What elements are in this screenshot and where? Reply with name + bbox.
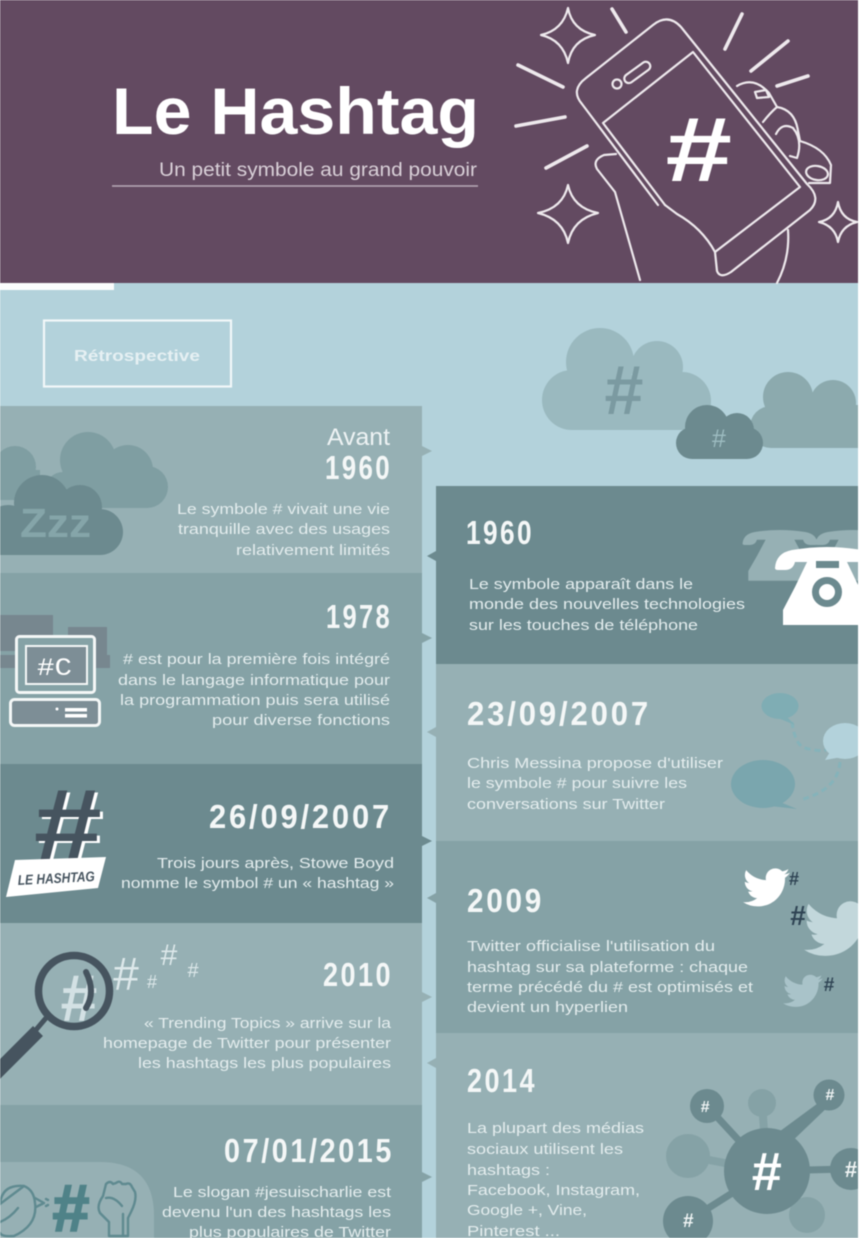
panel: 2010 <box>0 923 432 1105</box>
text block <box>467 755 723 813</box>
icon: twitter birds: # <box>790 900 806 931</box>
text block: devient un hyperlien <box>467 999 628 1016</box>
icon: hashtag network: # <box>826 1087 835 1104</box>
panel: 1960 telephone <box>427 486 860 664</box>
icon: hashtag network: # <box>683 1211 694 1232</box>
panel: 1978 <box>0 573 432 764</box>
text block: pour diverse fonctions <box>212 712 390 729</box>
icon: magnifying glass over hashtags: # <box>147 972 157 992</box>
text block <box>467 1120 644 1238</box>
icon: magnifying glass over hashtags <box>0 939 199 1075</box>
icon: hashtag network: # <box>701 1099 710 1116</box>
text block: hashtags : <box>467 1162 550 1179</box>
heading <box>326 428 390 480</box>
icon: sleeping clouds: Zzz <box>20 500 91 546</box>
icon: sky clouds with hashtags: # <box>712 425 726 453</box>
icon: le hashtag stamp: # <box>32 768 100 882</box>
text block: Chris Messina propose d'utiliser <box>467 755 723 772</box>
subtitle: Un petit symbole au grand pouvoir <box>159 160 478 181</box>
text block: dans le langage informatique pour <box>118 672 390 689</box>
heading: 07/01/2015 <box>224 1132 394 1169</box>
heading: 2014 <box>467 1062 537 1099</box>
text block <box>467 938 754 1016</box>
text block: conversations sur Twitter <box>467 796 665 813</box>
icon: magnifying glass over hashtags: # <box>113 948 139 1000</box>
heading: 26/09/2007 <box>209 798 392 835</box>
panel: 07/01/2015 <box>0 1105 432 1238</box>
icon: hashtag network: # <box>845 1157 857 1182</box>
icon: magnifying glass over hashtags: # <box>60 961 97 1035</box>
text block: Le symbole apparaît dans le <box>469 576 693 593</box>
text block <box>121 855 394 892</box>
heading: 1960 <box>466 514 534 551</box>
icon: le hashtag stamp: LE HASHTAG <box>17 868 95 888</box>
text block: Le symbole # vivait une vie <box>177 501 390 518</box>
icon: twitter birds <box>743 868 860 1007</box>
icon: magnifying glass over hashtags: # <box>161 939 178 972</box>
icon: le hashtag stamp <box>6 790 106 898</box>
text block <box>469 576 745 634</box>
text block: tranquille avec des usages <box>178 521 390 538</box>
icon: sparkle stars <box>538 8 857 243</box>
accent bar <box>0 283 114 290</box>
heading: 1978 <box>326 598 392 635</box>
text block: hashtag sur sa plateforme : chaque <box>467 959 748 976</box>
text block: sur les touches de téléphone <box>469 617 698 634</box>
text block: devenu l'un des hashtags les <box>162 1204 391 1221</box>
text block: les hashtags les plus populaires <box>138 1055 391 1072</box>
section label: Rétrospective: Rétrospective <box>74 348 200 365</box>
icon: hand holding phone with hashtag <box>516 8 857 283</box>
icon: radiating rays <box>516 9 808 168</box>
text block: relativement limités <box>236 542 390 559</box>
text block: La plupart des médias <box>467 1120 644 1137</box>
text block: nomme le symbol # un « hashtag » <box>121 875 394 892</box>
title: Le Hashtag <box>112 74 479 148</box>
text block: sociaux utilisent les <box>467 1141 623 1158</box>
header banner <box>0 0 858 283</box>
icon: sky clouds with hashtags <box>542 328 858 459</box>
heading: 23/09/2007 <box>467 695 651 732</box>
icon: sky clouds with hashtags: # <box>605 351 643 429</box>
text block: Facebook, Instagram, <box>467 1182 640 1199</box>
text block: « Trending Topics » arrive sur la <box>144 1015 392 1032</box>
icon: computer <box>0 615 110 726</box>
icon: hashtag network <box>663 1080 860 1238</box>
icon: magnifying glass over hashtags: # <box>187 960 199 982</box>
text block <box>162 1184 392 1238</box>
icon: charlie badge <box>0 1162 154 1238</box>
text block: homepage de Twitter pour présenter <box>103 1035 391 1052</box>
text block: Trois jours après, Stowe Boyd <box>157 855 394 872</box>
text block: le symbole # pour suivre les <box>467 775 687 792</box>
text block: Le slogan #jesuischarlie est <box>173 1184 392 1201</box>
icon: hashtag network: # <box>751 1142 781 1202</box>
icon: twitter birds: # <box>824 975 835 996</box>
icon: chat bubbles <box>731 693 860 809</box>
text block: # est pour la première fois intégré <box>123 651 390 668</box>
heading: 2009 <box>467 882 544 919</box>
icon: sleeping clouds <box>0 432 168 555</box>
heading: 2010 <box>323 956 393 993</box>
panel: 2009 <box>427 841 860 1033</box>
icon: telephones <box>743 530 860 625</box>
text block: la programmation puis sera utilisé <box>120 692 390 709</box>
panel: 26/09/2007 <box>0 764 432 923</box>
panel: 2014 <box>427 1033 860 1238</box>
panel: Avant 1960 <box>0 406 432 573</box>
icon: le hashtag stamp: # <box>35 770 103 884</box>
heading: Avant <box>327 424 390 451</box>
text block <box>103 1015 392 1072</box>
icon: phone hash: # <box>664 97 731 201</box>
text block: monde des nouvelles technologies <box>469 596 745 613</box>
icon: computer: #C <box>37 654 72 683</box>
panel: 23/09/2007 <box>427 664 860 841</box>
text block: Google +, Vine, <box>467 1202 587 1219</box>
section label: Rétrospective <box>44 320 231 386</box>
text block <box>177 501 390 559</box>
text block: terme précédé du # est optimisés et <box>467 979 754 996</box>
icon: twitter birds: # <box>789 869 799 889</box>
heading: 1960 <box>325 449 392 486</box>
text block <box>118 651 390 729</box>
text block: Twitter officialise l'utilisation du <box>467 938 715 955</box>
